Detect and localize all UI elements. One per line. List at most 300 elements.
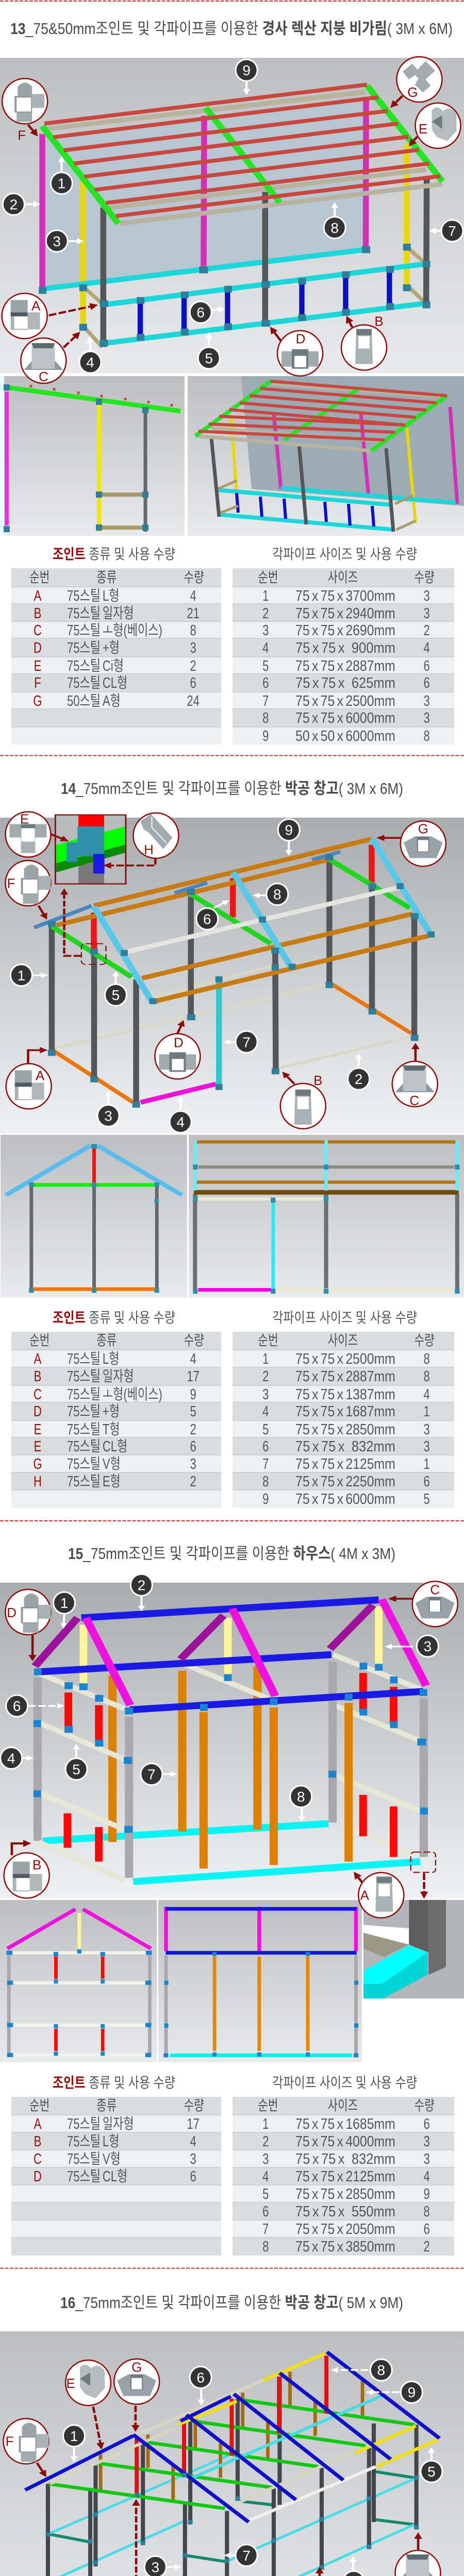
pipe table 13: 75 x 75 x 2940mm bbox=[295, 605, 395, 622]
callout C: C bbox=[409, 1093, 419, 1108]
badge 4: 4 bbox=[86, 354, 94, 370]
arrow: part 8 bbox=[335, 2368, 369, 2372]
arrow: part 7 bbox=[227, 2553, 235, 2557]
pipe table 13: 4 bbox=[262, 640, 269, 656]
arrow: joint D bbox=[177, 1023, 183, 1033]
pipe table 13: 수량 bbox=[415, 569, 435, 586]
joint table 15: 75스틸 CL형 bbox=[67, 2168, 127, 2185]
pipe table 14 bbox=[233, 1332, 454, 1508]
arrow: part 4 bbox=[23, 1756, 30, 1760]
arrow: joint D bbox=[272, 330, 281, 341]
pipe table 14: 수량 bbox=[415, 1332, 435, 1349]
arrow: part 5 bbox=[207, 335, 211, 347]
joint table 13: E bbox=[34, 658, 41, 674]
arrow: part 5 bbox=[114, 974, 118, 984]
badge 8: 8 bbox=[377, 2362, 385, 2378]
pipe table title 14: 각파이프 사이즈 및 사용 수량 bbox=[272, 1310, 417, 1326]
pipe table 13: 75 x 75 x 3700mm bbox=[295, 588, 395, 604]
detail image 15 bbox=[363, 1900, 464, 1998]
badge 5 bbox=[65, 1758, 87, 1780]
callout D bbox=[155, 1033, 200, 1079]
arrow: part 3 bbox=[69, 239, 80, 243]
callout E: E bbox=[66, 2376, 75, 2391]
pipe table 14: 5 bbox=[262, 1421, 269, 1438]
callout C: C bbox=[39, 369, 48, 384]
joint table 14 bbox=[11, 1332, 221, 1508]
joint table 15: 75스틸 일자형 bbox=[67, 2115, 134, 2132]
callouts and labels 15 bbox=[1, 1574, 458, 1819]
joint table 13: 6 bbox=[190, 675, 196, 691]
pipe table 14: 2 bbox=[262, 1368, 269, 1385]
badge 3 bbox=[46, 230, 68, 252]
joint table 14: 75스틸 L형 bbox=[67, 1351, 119, 1367]
main 3d drawing 16 bbox=[0, 2331, 464, 2576]
arrow: joint B bbox=[12, 1843, 27, 1855]
arrow: joint C bbox=[63, 334, 77, 347]
pipe table 15: 75 x 75 x 2125mm bbox=[295, 2168, 395, 2185]
joint table 13: 수량 bbox=[184, 569, 204, 586]
pipe table 15: 2 bbox=[424, 2239, 430, 2255]
joint table 14: 순번 bbox=[29, 1332, 49, 1349]
badge 8 bbox=[290, 1786, 312, 1807]
badge 8 bbox=[267, 884, 288, 905]
badge 5 bbox=[421, 2461, 442, 2482]
pipe table 15: 8 bbox=[424, 2204, 430, 2220]
joint table 13: 2 bbox=[190, 658, 196, 674]
badge 6 bbox=[196, 908, 218, 929]
badge 5: 5 bbox=[112, 987, 120, 1003]
pipe table 13: 사이즈 bbox=[328, 569, 358, 586]
badge 2 bbox=[343, 2571, 364, 2576]
joint table title 13: 조인트 종류 및 사용 수량 bbox=[53, 546, 175, 562]
main 3d drawing 14 bbox=[0, 818, 464, 1133]
pipe table 13: 50 x 50 x 6000mm bbox=[295, 728, 395, 744]
joint table 13: 순번 bbox=[29, 569, 49, 586]
arrow: joint E bbox=[51, 834, 65, 840]
callout B: B bbox=[32, 1857, 41, 1872]
arrow: part 1 bbox=[63, 1614, 64, 1626]
callout G bbox=[401, 821, 446, 866]
section 13 bbox=[0, 1, 464, 744]
badge 2: 2 bbox=[138, 1577, 145, 1593]
side elevation 14 bbox=[1, 1135, 464, 1298]
arrow: part 4 bbox=[88, 339, 92, 351]
joint table 14: 9 bbox=[190, 1386, 196, 1403]
callout C bbox=[412, 1581, 458, 1626]
arrow: joint A bbox=[28, 1050, 44, 1063]
badge 8: 8 bbox=[297, 1789, 305, 1805]
title 14: 14_75mm조인트 및 각파이프를 이용한 박공 창고( 3M x 6M) bbox=[61, 779, 403, 798]
badge 3: 3 bbox=[424, 1638, 432, 1654]
badge 6 bbox=[6, 1695, 28, 1717]
arrow: part 1 bbox=[72, 2448, 76, 2459]
callout F bbox=[2, 78, 47, 143]
dashed detail marker 15 bbox=[411, 1852, 436, 1872]
joint table 13: 50스틸 A형 bbox=[67, 693, 121, 709]
pipe table 15: 6 bbox=[424, 2221, 430, 2238]
badge 1: 1 bbox=[58, 176, 65, 192]
arrow: part 7 bbox=[433, 229, 440, 232]
pipe table 13: 3 bbox=[424, 588, 430, 604]
badge 9: 9 bbox=[408, 2384, 416, 2400]
callout A: A bbox=[36, 1067, 45, 1083]
badge 7: 7 bbox=[448, 223, 456, 239]
joint table 14: 75스틸 일자형 bbox=[67, 1368, 134, 1385]
callout G: G bbox=[418, 821, 428, 836]
joint table 13: A bbox=[34, 588, 42, 604]
callout D: D bbox=[174, 1035, 184, 1050]
pipe table 14: 75 x 75 x 2850mm bbox=[295, 1421, 395, 1438]
pipe table 14: 75 x 75 x 2250mm bbox=[295, 1473, 395, 1490]
pipe table 13: 6 bbox=[424, 658, 430, 674]
joint table 13: 75스틸 L형 bbox=[67, 588, 119, 604]
badge 1: 1 bbox=[18, 968, 25, 984]
joint table 14: 2 bbox=[190, 1421, 196, 1438]
pipe table 15: 4 bbox=[262, 2168, 269, 2185]
arrow: part 9 bbox=[369, 2391, 400, 2394]
arrow: detail link bbox=[422, 1873, 426, 1895]
joint table 15: 종류 bbox=[96, 2097, 117, 2114]
callout B: B bbox=[374, 313, 384, 329]
callout E: E bbox=[20, 811, 29, 827]
pipe table 13: 3 bbox=[424, 605, 430, 622]
pipe table title 13: 각파이프 사이즈 및 사용 수량 bbox=[272, 546, 417, 562]
callout F: F bbox=[18, 127, 26, 143]
pipe table 15: 3 bbox=[424, 2151, 430, 2167]
pipe table 15: 3 bbox=[262, 2151, 269, 2167]
badge 9 bbox=[401, 2381, 422, 2403]
badge 6: 6 bbox=[13, 1698, 21, 1714]
badge 3: 3 bbox=[53, 233, 61, 249]
arrow: part 8 bbox=[333, 205, 337, 217]
callouts and labels 14 bbox=[6, 811, 446, 1133]
joint table 13: 24 bbox=[187, 693, 200, 709]
badge 7 bbox=[141, 1764, 162, 1785]
badge 2: 2 bbox=[10, 196, 18, 212]
joint table 14: B bbox=[34, 1368, 41, 1385]
badge 4: 4 bbox=[7, 1750, 15, 1766]
joint table 14: H bbox=[34, 1473, 42, 1490]
pipe table 15: 사이즈 bbox=[328, 2097, 358, 2114]
callout A bbox=[6, 1063, 52, 1109]
arrow: joint D bbox=[318, 2570, 322, 2576]
joint table 14: 75스틸 CL형 bbox=[67, 1438, 127, 1455]
joint table 15: B bbox=[34, 2133, 41, 2150]
badge 7: 7 bbox=[147, 1767, 156, 1783]
pipe table 13: 8 bbox=[262, 710, 269, 726]
title 15: 15_75mm조인트 및 각파이프를 이용한 하우스( 4M x 3M) bbox=[68, 1545, 395, 1563]
pipe table 14: 75 x 75 x 2125mm bbox=[295, 1456, 395, 1472]
arrow: joint A bbox=[356, 1875, 362, 1883]
joint table 13: G bbox=[33, 693, 42, 709]
pipe table 14: 9 bbox=[262, 1491, 269, 1507]
badge 8: 8 bbox=[273, 887, 281, 903]
section 14 bbox=[0, 755, 464, 1508]
arrow: part 7 bbox=[226, 1040, 235, 1044]
badge 1 bbox=[54, 1592, 75, 1614]
badge 6: 6 bbox=[196, 304, 205, 320]
pipe table 13: 8 bbox=[424, 728, 430, 744]
pipe table 13: 2 bbox=[262, 605, 269, 622]
pipe table 14: 1 bbox=[424, 1456, 430, 1472]
arrow: part 8 bbox=[300, 1807, 304, 1819]
pipe table 13: 3 bbox=[424, 693, 430, 709]
arrow: part 9 bbox=[287, 841, 291, 853]
callout E bbox=[6, 811, 51, 857]
pipe table 15: 4 bbox=[424, 2168, 430, 2185]
joint table 14: 17 bbox=[187, 1368, 200, 1385]
pipe table 15: 순번 bbox=[258, 2097, 278, 2114]
arrow: joint G bbox=[380, 836, 401, 840]
callout B bbox=[4, 1853, 49, 1898]
arrow: joint F bbox=[39, 906, 45, 917]
pipe table 13: 75 x 75 x 625mm bbox=[295, 675, 395, 691]
arrow: joint F bbox=[28, 125, 36, 133]
arrow: joint B bbox=[134, 2502, 138, 2576]
pipe table 13: 2 bbox=[424, 622, 430, 639]
pipe table 15: 9 bbox=[424, 2186, 430, 2202]
joint table 15 bbox=[11, 2097, 221, 2256]
pipe table 15: 75 x 75 x 832mm bbox=[295, 2151, 395, 2167]
badge 4 bbox=[170, 1111, 191, 1133]
badge 7 bbox=[236, 1031, 257, 1053]
joint table 13: 75스틸 +형 bbox=[67, 640, 120, 656]
arrow: joint C bbox=[392, 1597, 413, 1601]
joint table 15: D bbox=[34, 2168, 42, 2185]
pipe table 14: 8 bbox=[424, 1351, 430, 1367]
arrow: joint C bbox=[413, 1046, 418, 1061]
pipe table 14: 3 bbox=[424, 1421, 430, 1438]
pipe table 15: 수량 bbox=[415, 2097, 435, 2114]
badge 5: 5 bbox=[427, 2464, 436, 2480]
callout H bbox=[134, 813, 178, 858]
pipe table 15: 5 bbox=[262, 2186, 269, 2202]
pipe table 14: 4 bbox=[262, 1403, 269, 1420]
pipe table 14: 1 bbox=[262, 1351, 269, 1367]
badge 1 bbox=[10, 964, 32, 986]
title 16: 16_75mm조인트 및 각파이프를 이용한 박공 창고( 5M x 9M) bbox=[60, 2294, 403, 2312]
joint table 13: 3 bbox=[190, 640, 196, 656]
badge 1 bbox=[63, 2425, 85, 2447]
joint table 15: 4 bbox=[190, 2133, 196, 2150]
pipe table 14: 3 bbox=[424, 1438, 430, 1455]
callouts and labels 13 bbox=[2, 57, 463, 384]
badge 3 bbox=[97, 1105, 119, 1127]
joint table 13: D bbox=[34, 640, 42, 656]
badge 2 bbox=[3, 193, 24, 215]
badge 5 bbox=[198, 347, 220, 369]
joint table 13: B bbox=[34, 605, 41, 622]
arrow: joint F bbox=[37, 2463, 44, 2474]
joint table 14: 75스틸 V형 bbox=[67, 1456, 121, 1472]
arrow: part 2 bbox=[140, 1596, 143, 1608]
callouts and labels 16 bbox=[3, 2359, 442, 2576]
callout E bbox=[65, 2360, 111, 2405]
pipe table 14: 75 x 75 x 2500mm bbox=[295, 1351, 395, 1367]
callout G bbox=[114, 2359, 159, 2404]
joint table 14: 6 bbox=[190, 1438, 196, 1455]
pipe table 15: 75 x 75 x 4000mm bbox=[295, 2133, 395, 2150]
joint table 13: C bbox=[34, 622, 42, 639]
pipe table 13: 1 bbox=[262, 588, 269, 604]
badge 5: 5 bbox=[205, 350, 213, 366]
badge 2 bbox=[348, 1068, 370, 1090]
callout F bbox=[6, 860, 51, 906]
pipe table 13: 75 x 75 x 6000mm bbox=[295, 710, 395, 726]
badge 4 bbox=[79, 351, 101, 373]
dashed detail marker 14 bbox=[81, 944, 106, 964]
pipe table 13 bbox=[233, 568, 454, 744]
arrow: joint D bbox=[30, 1635, 35, 1658]
arrow: joint G bbox=[134, 2406, 138, 2429]
badge 7 bbox=[441, 220, 463, 242]
arrow: part 5 bbox=[429, 2450, 433, 2460]
joint table 14: 75스틸 +형 bbox=[67, 1403, 120, 1420]
pipe table 13: 75 x 75 x 2690mm bbox=[295, 622, 395, 639]
badge 3: 3 bbox=[152, 2559, 159, 2575]
joint table 15: C bbox=[34, 2151, 42, 2167]
pipe table 14: 8 bbox=[424, 1368, 430, 1385]
joint table 14: 2 bbox=[190, 1473, 196, 1490]
badge 3 bbox=[417, 1635, 438, 1657]
pipe table 14: 75 x 75 x 1687mm bbox=[295, 1403, 395, 1420]
joint table 14: G bbox=[33, 1456, 42, 1472]
pipe table 15: 3 bbox=[424, 2133, 430, 2150]
joint table 15: 17 bbox=[187, 2116, 200, 2132]
perspective view 13 bbox=[188, 376, 464, 536]
arrow: part 1 bbox=[33, 973, 44, 977]
pipe table 14: 75 x 75 x 1387mm bbox=[295, 1386, 395, 1403]
pipe table 13: 7 bbox=[262, 693, 269, 709]
joint table 13: 75스틸 일자형 bbox=[67, 605, 134, 622]
callout C bbox=[392, 1061, 438, 1108]
badge 6 bbox=[190, 2367, 211, 2388]
joint table title 15: 조인트 종류 및 사용 수량 bbox=[53, 2075, 175, 2091]
pipe table 13: 75 x 75 x 2887mm bbox=[295, 658, 395, 674]
callout G: G bbox=[407, 84, 418, 100]
joint table 14: 5 bbox=[190, 1403, 196, 1420]
badge 5: 5 bbox=[72, 1761, 80, 1777]
pipe table 14: 75 x 75 x 2887mm bbox=[295, 1368, 395, 1385]
callout E: E bbox=[419, 121, 427, 137]
callout G bbox=[396, 57, 442, 102]
pipe table 13: 3 bbox=[424, 710, 430, 726]
badge 7 bbox=[236, 2545, 257, 2566]
joint table 14: 75스틸 ㅗ형(베이스) bbox=[67, 1386, 162, 1403]
arrow: joint B bbox=[348, 319, 352, 327]
joint table 15: 75스틸 V형 bbox=[67, 2151, 121, 2167]
joint table 14: 75스틸 E형 bbox=[67, 1473, 121, 1490]
arrow: detail link bbox=[64, 891, 81, 956]
pipe table 14: 1 bbox=[424, 1403, 430, 1420]
callout A: A bbox=[360, 1888, 370, 1903]
joint table 13: F bbox=[34, 675, 41, 691]
main 3d drawing 15 bbox=[0, 1583, 464, 1899]
pipe table 13: 3 bbox=[262, 622, 269, 639]
pipe table 14: 75 x 75 x 6000mm bbox=[295, 1491, 395, 1507]
arrow: part 5 bbox=[75, 1747, 78, 1758]
callout C bbox=[395, 2550, 440, 2576]
joint table 14: 4 bbox=[190, 1351, 196, 1367]
arrow: joint H bbox=[107, 859, 155, 866]
joint table title 14: 조인트 종류 및 사용 수량 bbox=[53, 1310, 175, 1326]
joint table 14: 수량 bbox=[184, 1332, 204, 1349]
front elevation 15 bbox=[0, 1843, 464, 2062]
pipe table 15: 2 bbox=[262, 2133, 269, 2150]
arrow: part 2 bbox=[357, 1056, 360, 1068]
callout B bbox=[280, 1073, 326, 1129]
main 3d drawing 13 bbox=[0, 58, 464, 373]
badge 4 bbox=[1, 1747, 22, 1769]
badge 8: 8 bbox=[330, 220, 339, 236]
section 15 bbox=[0, 1521, 464, 2256]
arrow: part 3 bbox=[107, 1093, 110, 1107]
pipe table title 15: 각파이프 사이즈 및 사용 수량 bbox=[272, 2075, 417, 2091]
badge 6: 6 bbox=[196, 2369, 205, 2385]
joint table 15: 3 bbox=[190, 2151, 196, 2167]
callout D bbox=[6, 1589, 51, 1635]
badge 3: 3 bbox=[104, 1108, 112, 1124]
pipe table 13: 5 bbox=[262, 658, 269, 674]
callout A: A bbox=[31, 298, 41, 313]
joint table 15: 수량 bbox=[184, 2097, 204, 2114]
pipe table 15 bbox=[233, 2097, 454, 2256]
badge 1: 1 bbox=[70, 2428, 78, 2444]
callout B bbox=[341, 313, 387, 370]
callout D bbox=[277, 331, 323, 376]
callout C bbox=[21, 338, 66, 384]
joint table 13: 75스틸 CL형 bbox=[67, 675, 127, 691]
pipe table 14: 3 bbox=[262, 1386, 269, 1403]
pipe table 13: 6 bbox=[262, 675, 269, 691]
callout F bbox=[4, 2418, 49, 2464]
joint table 14: A bbox=[34, 1351, 42, 1367]
pipe table 15: 6 bbox=[424, 2116, 430, 2132]
arrow: part 2 bbox=[25, 202, 37, 206]
pipe table 14: 사이즈 bbox=[328, 1332, 358, 1349]
arrow: joint A bbox=[49, 306, 94, 315]
callout H: H bbox=[144, 842, 154, 857]
arrow: part 9 bbox=[245, 81, 248, 92]
joint table 14: 종류 bbox=[96, 1332, 117, 1349]
pipe table 13: 75 x 75 x 2500mm bbox=[295, 693, 395, 709]
arrow: part 7 bbox=[163, 1772, 174, 1776]
pipe table 14: 5 bbox=[424, 1491, 430, 1507]
arrow: part 6 bbox=[200, 2389, 203, 2402]
callout F: F bbox=[6, 2433, 13, 2449]
callout A bbox=[358, 1873, 404, 1918]
arrow: part 6 bbox=[213, 902, 226, 908]
side elevation 15 bbox=[158, 1900, 362, 2062]
badge 9 bbox=[236, 59, 257, 81]
title 13: 13_75&50mm조인트 및 각파이프를 이용한 경사 렉산 지붕 비가림( 3M x 6M) bbox=[10, 20, 453, 38]
joint table 13: 21 bbox=[187, 605, 200, 622]
joint table 13: 4 bbox=[190, 588, 196, 604]
pipe table 15: 75 x 75 x 3850mm bbox=[295, 2239, 395, 2255]
inset detail box 14 bbox=[55, 815, 126, 884]
pipe table 14: 순번 bbox=[258, 1332, 278, 1349]
arrow: joint B bbox=[285, 1074, 294, 1084]
callout C: C bbox=[430, 1582, 440, 1597]
pipe table 15: 75 x 75 x 1685mm bbox=[295, 2116, 395, 2132]
pipe table 15: 75 x 75 x 2850mm bbox=[295, 2186, 395, 2202]
pipe table 15: 1 bbox=[262, 2116, 269, 2132]
pipe table 15: 7 bbox=[262, 2221, 269, 2238]
badge 2 bbox=[130, 1574, 152, 1596]
arrow: part 6 bbox=[212, 309, 222, 310]
section 16 bbox=[0, 2268, 464, 2576]
callout D: D bbox=[7, 1605, 16, 1620]
